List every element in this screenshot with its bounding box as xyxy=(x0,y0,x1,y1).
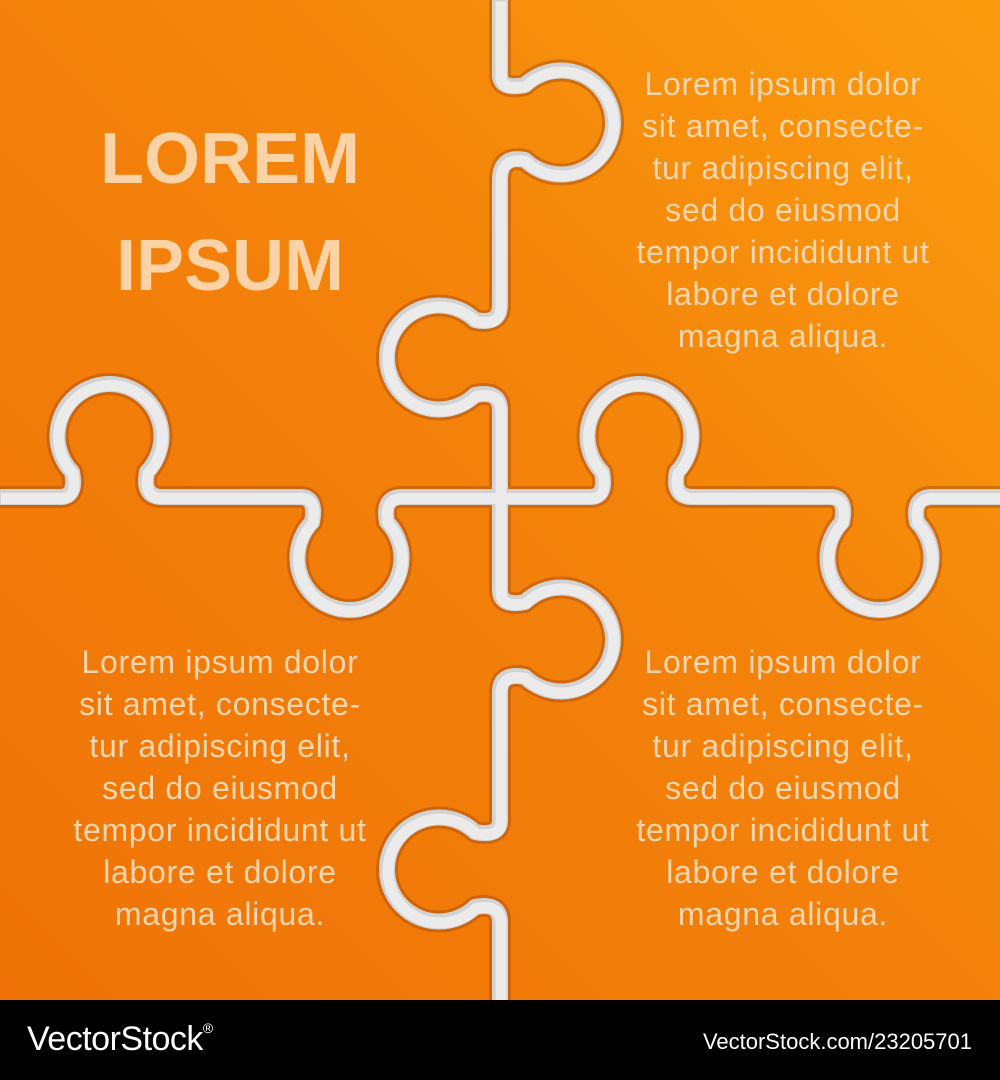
footer logo: VectorStock® xyxy=(27,1020,213,1058)
text block: bottom left: sit amet, consecte- xyxy=(79,686,361,722)
text block: bottom right: sit amet, consecte- xyxy=(642,686,924,722)
text block: bottom left: sed do eiusmod xyxy=(102,770,338,806)
text block: bottom left: Lorem ipsum dolor xyxy=(82,644,358,680)
text block: bottom left: tur adipiscing elit, xyxy=(89,728,351,764)
text block: bottom right xyxy=(636,644,930,932)
text block: bottom left: magna aliqua. xyxy=(115,896,325,932)
title: IPSUM xyxy=(116,226,344,306)
text block: bottom right: tur adipiscing elit, xyxy=(652,728,914,764)
text block: bottom right: Lorem ipsum dolor xyxy=(645,644,921,680)
text block: top right: Lorem ipsum dolor xyxy=(645,66,921,102)
text block: bottom left: tempor incididunt ut xyxy=(73,812,367,848)
text block: top right: labore et dolore xyxy=(666,276,900,312)
text block: bottom right: magna aliqua. xyxy=(678,896,888,932)
footer url: VectorStock.com/23205701 xyxy=(703,1029,972,1054)
text block: top right xyxy=(636,66,930,354)
text block: top right: magna aliqua. xyxy=(678,318,888,354)
footer xyxy=(0,1000,1000,1080)
text block: bottom right: labore et dolore xyxy=(666,854,900,890)
text block: top right: tempor incididunt ut xyxy=(636,234,930,270)
text block: bottom right: tempor incididunt ut xyxy=(636,812,930,848)
text block: top right: tur adipiscing elit, xyxy=(652,150,914,186)
text block: top right: sit amet, consecte- xyxy=(642,108,924,144)
title: LOREM xyxy=(100,119,360,199)
text block: bottom left xyxy=(73,644,367,932)
text block: bottom right: sed do eiusmod xyxy=(665,770,901,806)
text block: bottom left: labore et dolore xyxy=(103,854,337,890)
text block: top right: sed do eiusmod xyxy=(665,192,901,228)
title xyxy=(100,119,360,306)
